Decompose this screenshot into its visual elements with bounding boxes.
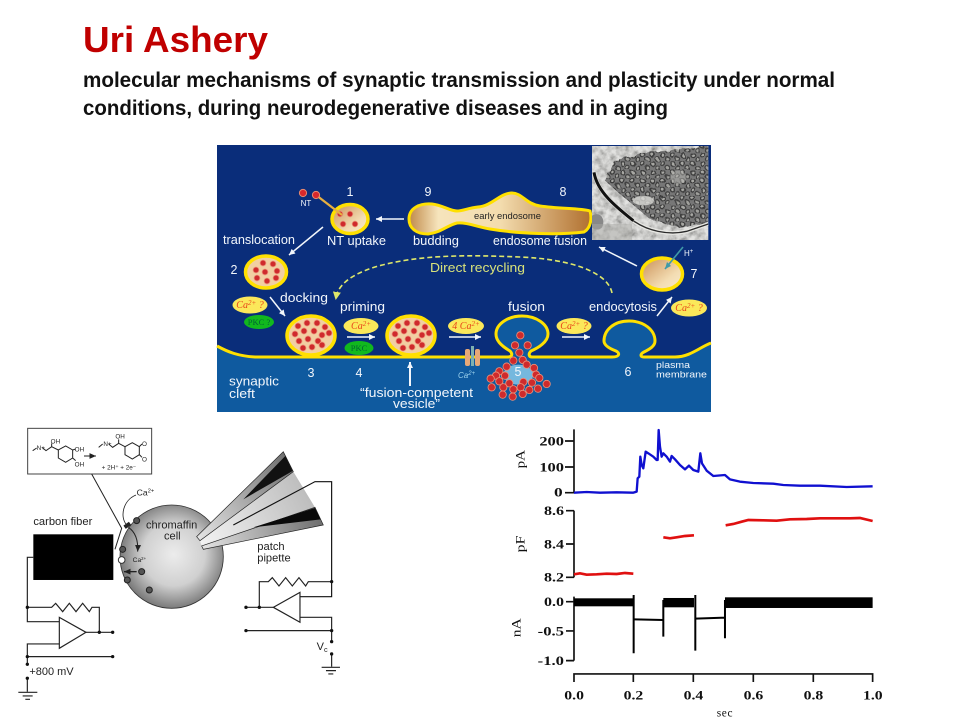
carbon fiber electrode [33, 534, 113, 580]
calcium and PKC ovals: Ca [560, 321, 572, 332]
vesicle 1: NT uptake [332, 204, 368, 234]
calcium and PKC ovals: 4 Ca [452, 321, 471, 332]
diagram labels: 4 [356, 366, 363, 380]
schematic labels: Ca [133, 557, 141, 564]
inset: catecholamine oxidation chemistry [28, 428, 152, 474]
calcium and PKC ovals [232, 296, 707, 355]
title: Uri Ashery [83, 19, 268, 60]
inset: catecholamine oxidation chemistry: OH [75, 462, 85, 469]
trace: holding current [574, 595, 873, 653]
axis tick labels: 0 [554, 486, 563, 500]
axis tick labels: 200 [539, 434, 564, 448]
schematic labels [29, 487, 328, 678]
diagram labels: synaptic [229, 374, 279, 388]
schematic labels: pipette [257, 553, 291, 565]
diagram labels: 6 [625, 365, 632, 379]
calcium and PKC ovals: 2+ [687, 302, 695, 310]
axis tick labels: 8.6 [544, 504, 564, 518]
vesicle 7: reacidification [642, 247, 683, 290]
plasma membrane [217, 316, 711, 357]
diagram labels: docking [280, 291, 328, 305]
calcium and PKC ovals: Ca [675, 303, 687, 314]
axis tick labels: 0.6 [744, 688, 763, 702]
diagram labels: membrane [656, 370, 707, 380]
diagram labels: fusion [508, 300, 545, 314]
calcium and PKC ovals: PKC ? [248, 317, 270, 327]
axis tick labels: 8.4 [544, 537, 565, 551]
axis tick labels: 0.0 [564, 688, 584, 702]
diagram labels: cleft [229, 387, 256, 401]
diagram labels: early endosome [474, 211, 541, 222]
axis tick labels: 0.2 [624, 688, 643, 702]
diagram labels: + [690, 249, 694, 255]
schematic labels: cell [164, 530, 181, 542]
axis titles: pA [514, 449, 528, 468]
electron micrograph inset [592, 146, 710, 240]
axis tick labels: 0.0 [544, 595, 564, 609]
calcium and PKC ovals: 2+ [471, 320, 480, 328]
schematic labels: 2+ [141, 556, 147, 561]
schematic labels: V [317, 641, 324, 653]
direct recycling dashed arrow [336, 256, 612, 298]
schematic labels: patch [257, 541, 285, 553]
diagram labels [223, 185, 707, 411]
vesicle 2: translocation [246, 256, 286, 288]
inset: catecholamine oxidation chemistry: O [142, 441, 147, 448]
diagram labels: priming [340, 300, 385, 314]
diagram labels: 2+ [467, 371, 476, 377]
panel: electrophysiology traces chart [510, 429, 883, 719]
diagram labels: endosome fusion [493, 234, 587, 248]
inset: catecholamine oxidation chemistry: + 2H⁺ + 2e⁻ [102, 465, 136, 472]
axis titles [510, 449, 733, 719]
subtitle text block [83, 69, 835, 120]
axis titles: sec [717, 707, 733, 719]
arrows [270, 219, 672, 386]
axis titles: pF [514, 536, 528, 552]
right amplifier circuit [244, 578, 340, 674]
panel: amperometry and patch-clamp schematic [18, 428, 340, 699]
calcium and PKC ovals: 2+ [572, 320, 580, 328]
inset: catecholamine oxidation chemistry: N+ [103, 441, 112, 448]
axis tick labels: 0.4 [684, 688, 704, 702]
neurotransmitter molecules: NT [301, 199, 311, 208]
diagram labels: 1 [347, 185, 354, 199]
axis tick labels [538, 434, 883, 702]
schematic labels: carbon fiber [33, 516, 93, 528]
calcium and PKC ovals: 2+ [363, 320, 371, 328]
schematic labels: 2+ [148, 488, 155, 494]
schematic labels: c [324, 645, 328, 654]
axes [565, 429, 873, 682]
left amplifier circuit [18, 557, 114, 699]
trace: membrane capacitance [574, 518, 873, 575]
diagram labels: H [684, 249, 690, 258]
inset: catecholamine oxidation chemistry: OH [75, 447, 85, 454]
subtitle text block: conditions, during neurodegenerative diseases and in aging [83, 97, 668, 120]
vesicle 4: priming [387, 316, 435, 355]
calcium and PKC ovals: ? [256, 300, 264, 311]
inset: catecholamine oxidation chemistry: O [142, 456, 147, 463]
axis titles: nA [510, 617, 524, 637]
diagram labels: NT uptake [327, 234, 386, 248]
diagram labels: endocytosis [589, 300, 657, 314]
inset: catecholamine oxidation chemistry: N+ [37, 445, 45, 452]
diagram labels: 2 [231, 263, 238, 277]
neurotransmitter molecules [299, 189, 342, 215]
inset: catecholamine oxidation chemistry: OH [51, 438, 61, 445]
subtitle text block: molecular mechanisms of synaptic transmission and plasticity under normal [83, 69, 835, 92]
schematic labels: chromaffin [146, 519, 197, 531]
calcium channel [465, 346, 480, 366]
inset: catecholamine oxidation chemistry: OH [115, 434, 125, 441]
calcium and PKC ovals: Ca [236, 300, 248, 311]
schematic labels: +800 mV [29, 666, 74, 678]
axis tick labels: -1.0 [538, 654, 564, 668]
patch pipette [197, 452, 332, 597]
diagram labels: “fusion-competent [360, 386, 474, 400]
chromaffin cell [120, 505, 223, 608]
diagram labels: 7 [691, 267, 698, 281]
trace: amperometric current [574, 430, 873, 493]
diagram labels: Ca [458, 371, 468, 380]
axis tick labels: 0.8 [804, 688, 823, 702]
diagram labels: 9 [425, 185, 432, 199]
diagram labels: 5 [515, 365, 522, 379]
diagram labels: plasma [656, 360, 690, 370]
calcium and PKC ovals: PKC [351, 343, 368, 353]
diagram labels: vesicle” [393, 397, 440, 411]
secretory granules and calcium arrows [92, 474, 152, 593]
diagram labels: translocation [223, 233, 295, 247]
calcium and PKC ovals: ? [580, 321, 588, 332]
vesicle 3: docking [287, 316, 335, 355]
fusion: released neurotransmitter cluster [487, 332, 550, 400]
diagram labels: 3 [308, 366, 315, 380]
axis tick labels: -0.5 [538, 624, 564, 638]
calcium and PKC ovals: ? [695, 303, 703, 314]
axis tick labels: 1.0 [863, 688, 883, 702]
axis tick labels: 100 [539, 460, 564, 474]
endosome and budding shape [409, 193, 591, 234]
axis tick labels: 8.2 [544, 571, 564, 585]
diagram labels: 8 [560, 185, 567, 199]
diagram labels: Direct recycling [430, 260, 525, 275]
calcium and PKC ovals: 2+ [248, 299, 256, 307]
diagram labels: budding [413, 234, 459, 248]
schematic labels: Ca [137, 487, 148, 497]
panel: synaptic vesicle cycle diagram [217, 145, 711, 412]
calcium and PKC ovals: Ca [351, 321, 363, 332]
